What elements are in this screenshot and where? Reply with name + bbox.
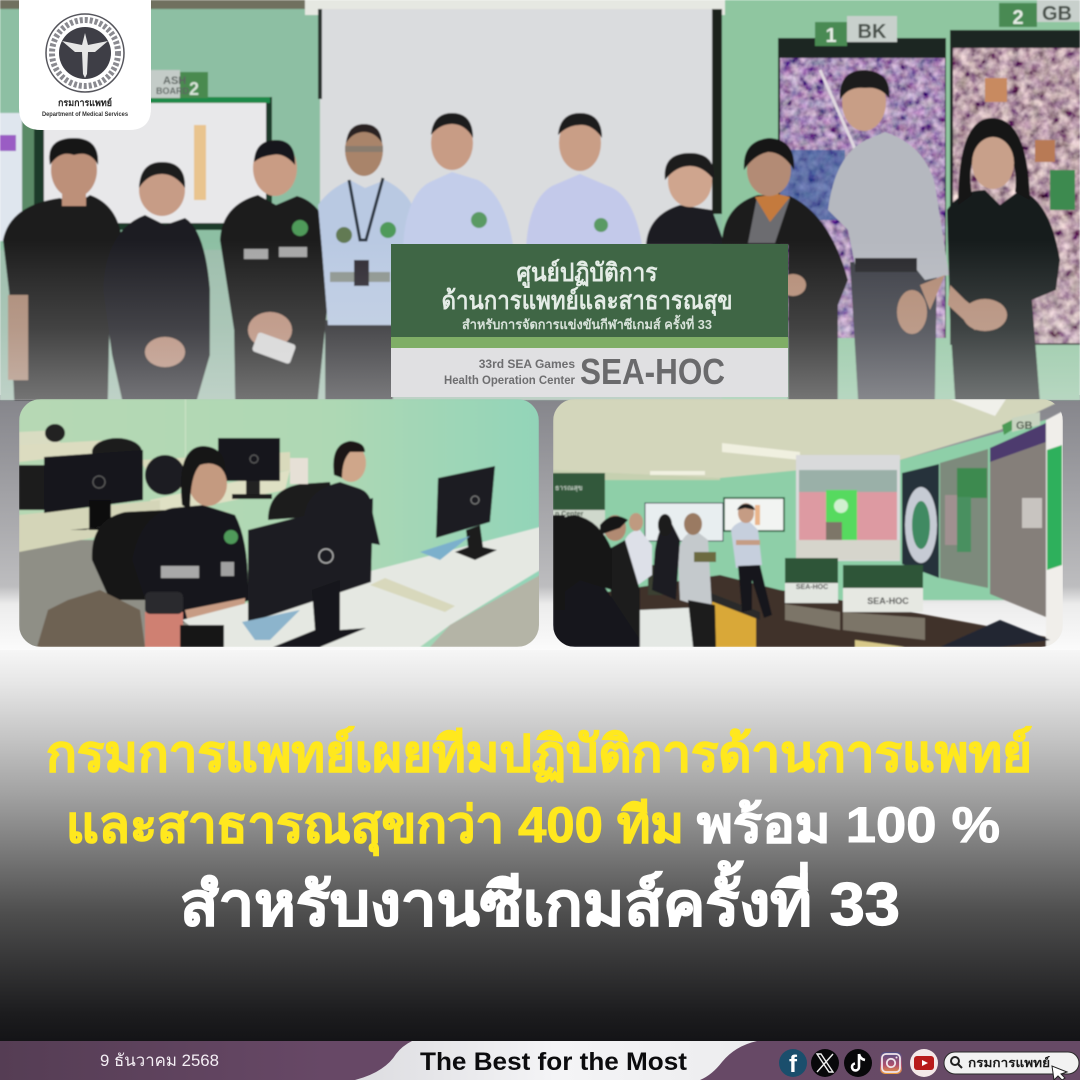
person 10: [947, 118, 1060, 400]
map screen GB: 2: [1012, 7, 1024, 29]
sign: SEA-HOC: สำหรับการจัดการแข่งขันกีฬาซีเกมส์ ครั้งที่ 33: [462, 314, 712, 332]
page background gradient: [0, 640, 1080, 1080]
main group photo: [0, 0, 1080, 400]
person 1: [3, 138, 122, 400]
wall sign: [553, 472, 606, 511]
standing man: [731, 503, 772, 618]
icon: cursor: [1052, 1066, 1067, 1080]
photo: SEA-HOC control room: SEA-HOC: [867, 596, 909, 606]
projector screen: [305, 0, 725, 249]
search pill: กรมการแพทย์: [968, 1056, 1050, 1070]
projector screen: [796, 455, 900, 561]
sign: SEA-HOC: ด้านการแพทย์และสาธารณสุข: [442, 286, 732, 317]
person 7: [646, 153, 725, 245]
people group: [600, 513, 716, 647]
screen labels: [1002, 412, 1040, 435]
dashboard screen: BOARD: [156, 86, 189, 96]
footer bar: [0, 1041, 1080, 1080]
icon: facebook: [779, 1049, 807, 1078]
headline line 1: กรมการแพทย์เผยทีมปฏิบัติการด้านการแพทย์: [46, 726, 1032, 782]
sign: SEA-HOC: Health Operation Center: [444, 373, 575, 387]
standing signs: [785, 558, 838, 603]
dashboard screen: ASH: [163, 75, 186, 87]
logo card: [19, 0, 151, 130]
sign: SEA-HOC: [391, 244, 788, 397]
person 8: [722, 138, 848, 400]
headline line 2 white: พร้อม 100 %: [697, 797, 1000, 853]
headline line 2 yellow: และสาธารณสุขกว่า 400 ทีม: [66, 797, 684, 856]
map screen GB: [950, 0, 1080, 345]
icon: monitor back middle: [218, 438, 280, 499]
icon: tiktok: [844, 1049, 872, 1077]
wall: [0, 0, 1080, 400]
photo: SEA-HOC control room: n Center: [555, 511, 584, 518]
floor: [607, 574, 1047, 647]
search pill: [944, 1052, 1079, 1080]
person 3: [220, 140, 333, 400]
icon: monitor back left: [44, 450, 143, 530]
wall: [604, 419, 1047, 602]
map screen 1: [902, 464, 939, 578]
photo: SEA-HOC control room: [553, 399, 1063, 647]
sign: SEA-HOC: SEA-HOC: [580, 351, 725, 392]
photo fade overlay: [0, 240, 1080, 400]
map screen 2: [940, 449, 988, 588]
map screen BK: [778, 16, 946, 338]
photo: office computers: [19, 399, 540, 647]
ceiling lights: [722, 443, 800, 460]
logo card: กรมการแพทย์: [58, 97, 112, 109]
icon: tumbler: [145, 592, 183, 647]
white desk: [182, 527, 540, 647]
person 9: [828, 70, 949, 400]
person 5: [403, 113, 513, 250]
sign: SEA-HOC: 33rd SEA Games: [479, 357, 575, 371]
icon: X: [811, 1049, 839, 1077]
ceiling: [553, 399, 1063, 478]
icon: instagram: [880, 1052, 902, 1074]
map screen GB: GB: [1042, 3, 1072, 25]
tables: [640, 565, 1050, 647]
woman 1: [92, 446, 250, 630]
date: 9 ธันวาคม 2568: [100, 1051, 219, 1070]
icon: ministry seal: [46, 14, 124, 92]
icon: right monitor: [420, 466, 497, 560]
icon: youtube: [910, 1049, 938, 1077]
icon: facebook: f: [789, 1051, 798, 1078]
bag: [37, 590, 145, 647]
small left screen: [0, 113, 22, 241]
dashboard screen: [34, 70, 272, 230]
fade strip behind small photos: [0, 395, 1080, 650]
woman foreground: [553, 515, 640, 647]
sign: SEA-HOC: ศูนย์ปฏิบัติการ: [516, 258, 658, 289]
person 2: [103, 162, 210, 400]
dashboard screen: 2: [189, 79, 199, 99]
map screen BK: 1: [825, 25, 837, 47]
icon: main monitor: [242, 498, 373, 647]
map screen BK: BK: [858, 21, 887, 43]
headline line 3: สำหรับงานซีเกมส์ครั้งที่ 33: [180, 860, 900, 938]
logo card: Department of Medical Services: [42, 111, 128, 118]
woman 2: [268, 441, 380, 545]
person 6: [526, 113, 642, 250]
slogan: The Best for the Most: [420, 1048, 688, 1076]
wall monitors: [645, 503, 723, 541]
photo: SEA-HOC control room: ธารณสุข: [555, 485, 583, 492]
person 4: [318, 124, 412, 400]
screen labels: GB: [1016, 420, 1033, 432]
standing signs: SEA-HOC: [796, 584, 828, 591]
map screen 3: [990, 423, 1046, 617]
back desks: [19, 430, 60, 446]
headline: [46, 726, 1032, 938]
footer swoosh: [355, 1041, 757, 1080]
